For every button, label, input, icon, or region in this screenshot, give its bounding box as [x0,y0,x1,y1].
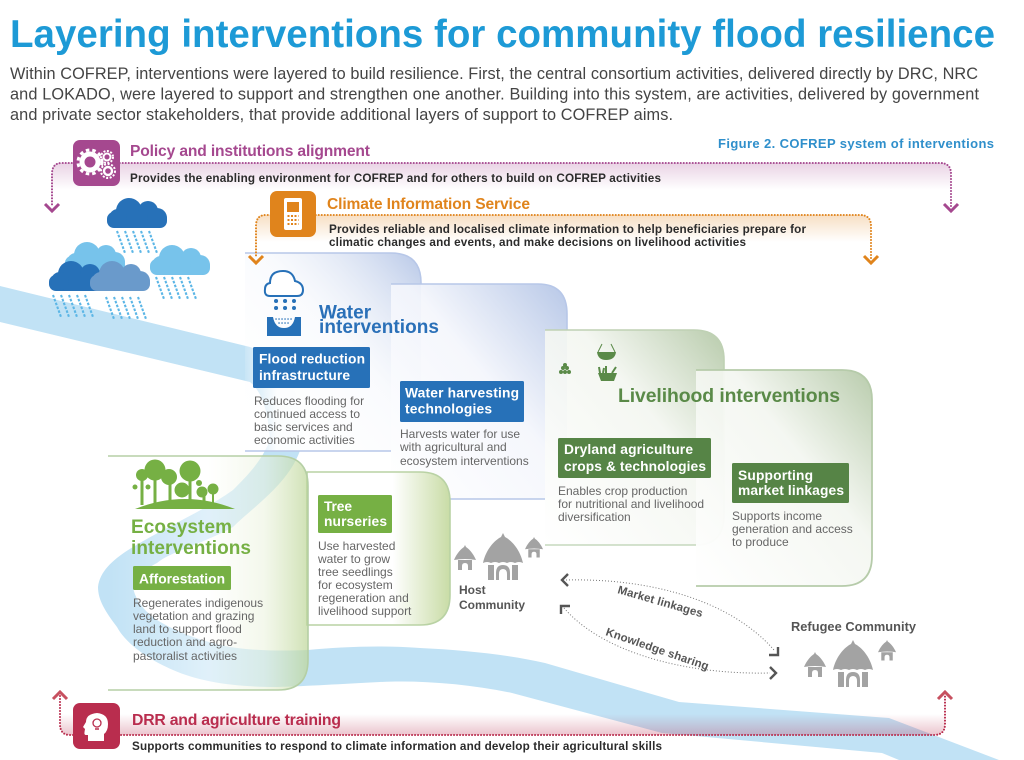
text: flood description: basic services and [254,420,353,434]
heading: water interventions [319,302,439,338]
label: refugee community: Refugee Community [791,619,917,634]
panel: tree nurseries background [307,472,450,625]
card: water harvesting: technologies [405,402,492,416]
icon: head with lightbulb [73,703,120,749]
heading: policy: Policy and institutions alignment [130,143,370,160]
card: afforestation: Afforestation [139,572,225,586]
text: flood description: economic activities [254,433,355,447]
text: afforestation description: pastoralist activities [133,649,237,663]
heading: water interventions: Water [319,302,372,324]
text: climate description: Provides reliable and localised climate information to help beneficiaries prepare for [329,223,806,236]
icon: refugee community huts [804,640,896,687]
figure caption: Figure 2. COFREP system of interventions [718,136,994,151]
text: afforestation description: reduction and agro- [133,635,237,649]
text: tree nurseries description: Use harvested [318,539,395,553]
label: host community: Community [459,598,525,612]
text: dryland description: for nutritional and livelihood [558,497,704,511]
heading: climate: Climate Information Service [327,196,530,213]
dotted arrow: climate [256,215,871,258]
card: dryland agriculture [558,438,711,478]
text: market description: generation and access [732,522,853,536]
card: water harvesting: Water harvesting [405,386,519,400]
text: water harvesting description: Harvests water for use [400,427,520,441]
heading: ecosystem interventions: interventions [131,538,251,559]
arrow: market linkages [562,574,778,655]
text: DRR description: Supports communities to respond to climate information and develop their agricultural skills [132,740,662,753]
card: supporting market linkages: market linkages [738,483,844,498]
label: knowledge sharing: Knowledge sharing [604,626,710,673]
water panel outlines [245,253,567,499]
panel: policy band [45,140,958,211]
label: host community: Host [459,583,486,597]
text: tree nurseries description: for ecosystem [318,578,393,592]
card: afforestation [133,566,231,590]
text: water harvesting description [399,427,529,468]
heading: ecosystem interventions [131,517,251,559]
rain clouds icon [49,198,210,319]
card: flood reduction: Flood reduction [259,352,365,366]
icon: gears [73,140,120,186]
text: tree nurseries description: regeneration and [318,591,409,605]
livelihood outline [696,370,872,586]
card: flood reduction [253,347,370,388]
text: water harvesting description: with agricultural and [399,440,507,454]
heading: livelihood interventions: Livelihood interventions [618,385,840,407]
card: tree nurseries [318,495,392,533]
text: flood description: Reduces flooding for [254,394,364,408]
dotted arrow: DRR [60,696,945,735]
intro text [10,65,979,124]
card: tree nurseries: nurseries [324,514,387,529]
card: dryland agriculture: crops & technologies [564,459,706,474]
text: afforestation description: vegetation and grazing [133,609,254,623]
card: water harvesting [400,381,524,422]
text: afforestation description: land to support flood [133,622,242,636]
dotted arrow: policy [52,163,951,206]
icon: crops [559,363,571,374]
text: tree nurseries description: water to grow [317,552,390,566]
text: afforestation description: Regenerates indigenous [133,596,263,610]
panel: livelihood market background [696,370,872,586]
icon: cloud and basin [265,271,303,336]
panel: DRR band [53,692,952,753]
text: flood description: continued access to [254,407,360,421]
text: market description [732,509,853,549]
text: tree nurseries description: livelihood support [318,604,412,618]
title: Layering interventions for community flood resilience [10,13,995,56]
card: supporting market linkages: Supporting [738,468,813,483]
icon: bowl [597,344,616,360]
icon: basket [598,366,617,381]
card: tree nurseries: Tree [324,499,352,514]
text: climate description [329,223,806,249]
label: market linkages: Market linkages [616,584,704,620]
intro text: and private sector stakeholders, that provide additional layers of support to COFREP aims. [10,106,673,124]
text: market description: Supports income [732,509,822,523]
text: flood description [254,394,364,447]
icon: trees [132,460,235,509]
text: tree nurseries description [317,539,412,618]
river [0,286,999,760]
icon: host community huts [454,533,543,580]
text: water harvesting description: ecosystem interventions [400,454,529,468]
intro text: Within COFREP, interventions were layered to build resilience. First, the central consortium activities, delivered directly by DRC, NRC [10,65,978,83]
text: dryland description: Enables crop production [558,484,687,498]
arrow: knowledge sharing [561,606,776,679]
panel: climate band [249,191,878,263]
heading: ecosystem interventions: Ecosystem [131,517,232,538]
panel: water harvesting background [391,284,567,499]
heading: water interventions: interventions [319,317,439,338]
text: tree nurseries description: tree seedlings [318,565,393,579]
text: afforestation description [133,596,263,663]
text: dryland description [558,484,704,524]
panel: ecosystem background [108,456,308,690]
text: dryland description: diversification [558,510,631,524]
card: dryland agriculture: Dryland agriculture [564,442,693,457]
heading: DRR: DRR and agriculture training [132,712,341,729]
card: flood reduction: infrastructure [259,368,350,383]
text: policy description: Provides the enabling environment for COFREP and for others to build on COFREP activities [130,172,661,185]
panel: livelihood dryland background [545,330,724,545]
text: market description: to produce [732,535,789,549]
water flood panel tint [245,253,421,451]
card: supporting market linkages [732,463,849,503]
icon: phone [270,191,316,237]
livelihood dryland outline [545,330,724,545]
label: host community [459,583,525,612]
text: climate description: climatic changes and events, and make decisions on livelihood activities [329,236,746,249]
panel: water interventions flood [245,253,421,451]
intro text: and LOKADO, were layered to support and strengthen one another. Building into this system, are activities, delivered by government [10,86,979,104]
